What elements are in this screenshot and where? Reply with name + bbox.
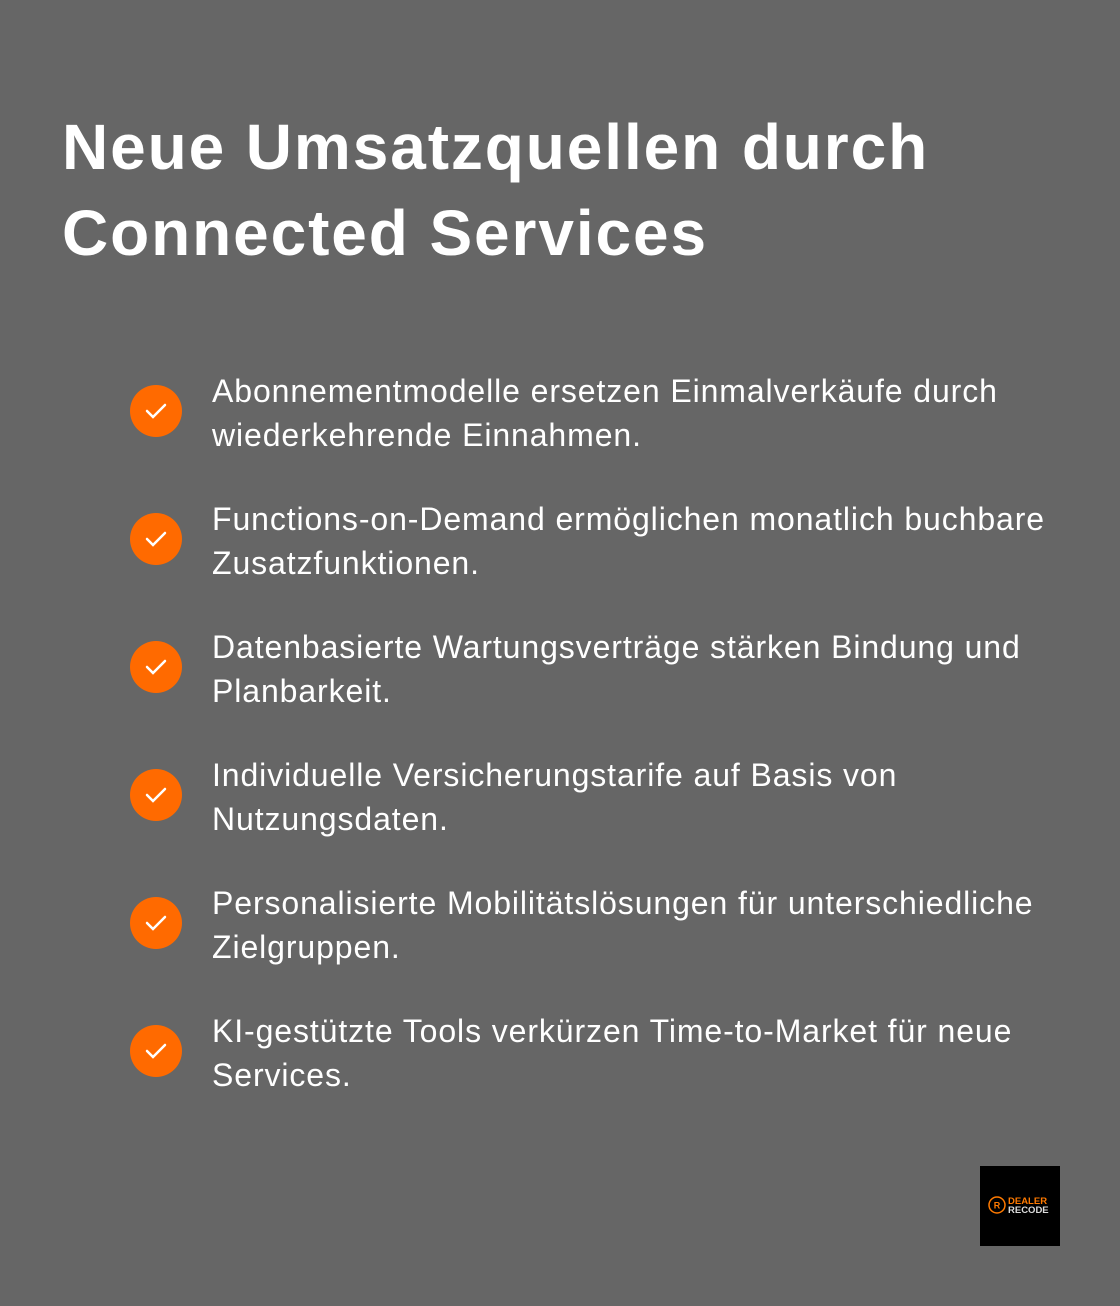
text: Nutzungsdaten.: [212, 801, 449, 837]
text: Functions-on-Demand ermöglichen monatlich buchbare: [212, 501, 1045, 537]
text: Zielgruppen.: [212, 929, 401, 965]
text: [212, 885, 1033, 965]
item 4: [130, 757, 897, 837]
logo: R: [994, 1200, 1001, 1210]
logo: DEALER: [1008, 1196, 1047, 1207]
text: Abonnementmodelle ersetzen Einmalverkäufe durch: [212, 373, 998, 409]
text: wiederkehrende Einnahmen.: [212, 417, 642, 453]
icon: check: [130, 769, 182, 821]
text: [212, 629, 1021, 709]
text: Datenbasierte Wartungsverträge stärken Bindung und: [212, 629, 1021, 665]
text: [212, 373, 998, 453]
text: Personalisierte Mobilitätslösungen für unterschiedliche: [212, 885, 1033, 921]
icon: check: [130, 1025, 182, 1077]
icon: check: [130, 641, 182, 693]
icon: check: [130, 385, 182, 437]
item 2: [130, 501, 1045, 581]
icon: check: [130, 897, 182, 949]
text: KI-gestützte Tools verkürzen Time-to-Market für neue: [212, 1013, 1012, 1049]
text: [212, 1013, 1012, 1093]
title: [62, 111, 929, 269]
logo: [980, 1166, 1060, 1246]
item 5: [130, 885, 1033, 965]
title: Neue Umsatzquellen durch: [62, 111, 929, 183]
item 3: [130, 629, 1021, 709]
logo: RECODE: [1008, 1205, 1049, 1216]
title: Connected Services: [62, 197, 708, 269]
text: [212, 757, 897, 837]
text: [212, 501, 1045, 581]
text: Zusatzfunktionen.: [212, 545, 480, 581]
text: Services.: [212, 1057, 352, 1093]
text: Planbarkeit.: [212, 673, 392, 709]
text: Individuelle Versicherungstarife auf Basis von: [212, 757, 897, 793]
icon: check: [130, 513, 182, 565]
item 1: [130, 373, 998, 453]
item 6: [130, 1013, 1012, 1093]
